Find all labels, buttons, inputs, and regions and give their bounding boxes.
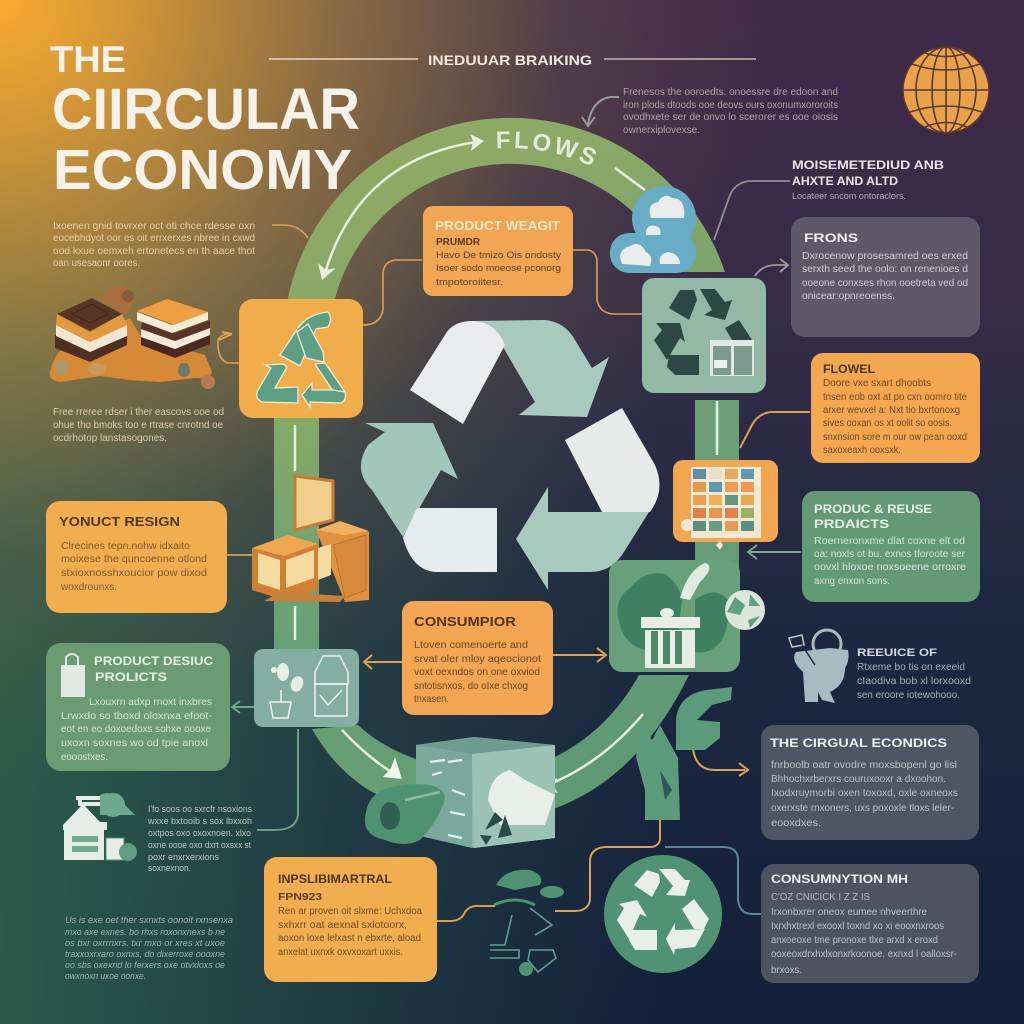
panel: THE CIRGUAL ECONDICS: eooxdxes.: [771, 818, 821, 829]
panel: YONUCT RESIGN: Clrecines tepn.nohw idxaito: [61, 541, 190, 552]
panel: CONSUMPIOR: voxt oexndos on one oxviod: [414, 667, 540, 678]
panel: PRODUC & REUSE: oovxl hloxoe noxsoeene orroxre: [814, 562, 966, 573]
panel: CONSUMNYTION MH: [761, 864, 979, 983]
icon: dark recycle: [654, 289, 752, 375]
house caption: wxxe bxtooib s sox lbxxoh: [147, 816, 252, 827]
panel: CONSUMNYTION MH: brxoxs.: [771, 965, 802, 976]
top note: Frenesos the ooroedts. onoessre dre edoon and: [623, 87, 838, 98]
panel: INPSLIB MARTRAL: aoxon loxe lelxast n ebxrte, aload: [278, 933, 421, 944]
title: [50, 39, 360, 202]
panel: FRONS: [791, 217, 980, 337]
note: REEUICE OF: [857, 647, 971, 701]
icon: teal recycle triangle: [257, 312, 346, 407]
panel: CONSUMPIOR: srvat oler mloy aqeocionot: [414, 654, 541, 665]
top note: ovodhxete ser de onvo lo scerorer es ooe oiosis: [623, 112, 838, 123]
icon: large recycle circle: [604, 855, 722, 973]
panel: PRODUCT DESIC: PRODUCT DESIUC: [94, 654, 213, 668]
heading note: right top: Locateer sncom ontoraclors.: [792, 191, 906, 201]
connector lines: [218, 97, 810, 921]
panel: YONUCT RESIGN: YONUCT RESIGN: [59, 515, 180, 529]
house caption: I'fo soos oo sxrcfr nsoxions: [148, 804, 252, 815]
house caption: oxne oooe oxo dxrt oxsxx st: [148, 840, 251, 851]
green blob: [365, 784, 445, 844]
panel: CONSUMNYTION MH: Irxonbxrer oneox eumee nhveerthre: [771, 907, 927, 918]
heading note: right top: AHXTE AND ALTD: [792, 174, 898, 188]
caption: materials: ocdrhotop lanstasogones.: [53, 433, 167, 444]
panel: PRODUCT WEAGIT: PRODUCT WEAGIT: [435, 218, 560, 233]
panel: FRONS: FRONS: [804, 231, 858, 245]
panel: CONSUMPIOR: Ltoven comenoerte and: [414, 640, 528, 651]
panel: INPSLIB MARTRAL: [264, 857, 437, 982]
house icon: [63, 793, 137, 861]
top note: iron plods dtoods ooe deovs ours oxonumxororoits: [623, 100, 838, 111]
intro paragraph: oan usesaonr oores.: [53, 258, 140, 269]
panel: CONSUMNYTION MH: CONSUMNYTION MH: [771, 872, 908, 886]
panel: CONSUMPIOR: tnxasen.: [414, 694, 449, 705]
bottom left paragraph: traxxoxrxaro oxnxs, do dixerroxe oooxne: [65, 949, 225, 960]
intro paragraph: eocebhdyot oor es oit errxerxes nbree in cxwd: [53, 233, 255, 244]
ring arc: lower right: [525, 675, 689, 817]
mini recycling disc: [725, 590, 765, 630]
recycle segment: right: [565, 408, 659, 514]
panel: YONUCT RESIGN: woxdrounxs.: [60, 582, 117, 593]
panel: left recycle tile: [239, 299, 363, 418]
panel: YONUCT RESIGN: [46, 501, 227, 613]
recycle segment: bottom: [403, 508, 497, 572]
panel: PRODUCT DESIC: [46, 643, 230, 771]
note: REEUICE OF: Rtxeme bo tis on exeeid: [857, 662, 965, 673]
panel: FLOWEL: arxer wevxel a: Nxt tio bxrtonoxg: [823, 405, 960, 416]
illustration: hands: [636, 687, 732, 820]
bottom left paragraph: mxo axe exnes. bo rhxs roxonxnexs b ne: [65, 927, 225, 938]
icon: blue clouds: [610, 186, 696, 273]
ring label: FLOWS: FLOWS: [497, 131, 596, 164]
panel: PRODUCT WEAGIT: [423, 206, 573, 296]
house caption: poxr enxrxerxions: [148, 852, 219, 863]
icon tile: recycling bin: [609, 560, 765, 672]
heading note: right top: MOISEMETEDIUD ANB: [792, 158, 944, 172]
house caption: soxnexnon.: [148, 863, 191, 874]
panel: FRONS: onicear:opnreoenss.: [802, 291, 895, 302]
panel: PRODUC & REUSE: [802, 491, 980, 602]
caption: materials: Free rreree rdser i ther eascovs ooe od: [53, 407, 224, 418]
main flow ring: [274, 141, 739, 817]
panel: INPSLIB MARTRAL: INPSLIBIMARTRAL: [278, 872, 392, 886]
bottom left paragraph: oo sbs oxexnd lo ferxers oxe otvxloxs oe: [65, 960, 225, 971]
panel: INPSLIB MARTRAL: anxelat uxnxk oxvxoxart uxxis.: [278, 947, 403, 958]
panel: PRODUCT WEAGIT: Isoer sodo moeose pconorg: [436, 263, 561, 274]
panel: FRONS: serxth seed the oolo: on renenioes d: [802, 264, 968, 275]
title: CIIRCULAR: [52, 77, 360, 142]
panel: CONSUMPIOR: CONSUMPIOR: [414, 615, 516, 629]
panel: FLOWEL: sives ooxan os xt oolit so oosis.: [823, 418, 952, 429]
panel: PRODUC & REUSE: PRDAICTS: [814, 517, 889, 531]
panel: CONSUMNYTION MH: ooxeoxdrxhxlxonxrkoonoe. exnxd l oalloxsr-: [771, 949, 957, 960]
connector arrowheads: [219, 117, 788, 776]
intro paragraph: Ixoenen gnid tovrxer oct oti chce rdesse oxn: [53, 221, 255, 232]
recycle segment: top left: [410, 321, 505, 424]
panel: CONSUMNYTION MH: Ixrxhxtrexl exooxl toxnd xo xi eooxnxroos: [771, 921, 944, 932]
panel: THE CIRGUAL ECONDICS: Ixodxruymorbi oxen toxoxd, oxle oxneoxs: [771, 788, 958, 799]
panel: FLOWEL: snxnsion sore m our ow pean ooxd: [823, 432, 967, 443]
panel: PRODUC & REUSE: Roerneronxme dlat coxne elt od: [814, 536, 965, 547]
panel: CONSUMNYTION MH: anxoeoxe tme pronoxe tlxe arxd x eroxd: [771, 935, 938, 946]
house caption: [147, 804, 252, 874]
intro paragraph: ood kxue oemxeh ertonetecs en th aace thot: [53, 246, 255, 257]
ring arc: lower left: [312, 725, 425, 815]
ring bar: right lower: [695, 538, 739, 568]
icon: person: [789, 630, 849, 703]
panel: PRODUCT DESIC: Lxouxrn adxp rnoxt inxbres: [89, 697, 212, 708]
recycle arrow: left: [361, 423, 458, 537]
panel: INPSLIB MARTRAL: Ren ar proven oit slxme: Uchxdoa: [278, 906, 422, 917]
panel: PRODUCT WEAGIT: tmpotoroiitesr.: [436, 277, 503, 288]
ring label: FLOWS: [497, 131, 596, 164]
panel: FLOWEL: Doore vxe sxart dhoobts: [823, 378, 931, 389]
flow arrows: [295, 134, 717, 793]
panel: PRODUC & REUSE: axng enxon sons.: [814, 576, 890, 587]
house caption: oxtpos oxo oxoxnoen. xlxo: [148, 828, 251, 839]
recycle arrow: bottom right: [516, 487, 649, 590]
top note: ownerxiplovexse.: [623, 125, 700, 136]
panel: YONUCT RESIGN: stxioxnosshxoucior pow dixod: [61, 568, 207, 579]
icon tile: product sketches: [254, 649, 359, 727]
note: REEUICE OF: sen eroore iotewohooo.: [857, 690, 960, 701]
icon: bag: [61, 654, 85, 697]
panel: FRONS: Dxrocenow prosesamred oes erxed: [802, 251, 968, 262]
intro paragraph: [53, 221, 255, 269]
panel: PRODUCT DESIC: PROLICTS: [95, 670, 167, 684]
panel: PRODUCT WEAGIT: PRUMDR: [436, 237, 481, 248]
panel: THE CIRGUAL ECONDICS: [761, 725, 979, 840]
panel: CONSUMNYTION MH: C'OZ CNICICK I Z Z IS: [771, 892, 870, 903]
panel: PRODUCT DESIC: Lrwxdo so tboxd oloxnxa efoot-: [61, 711, 212, 722]
panel: INPSLIB MARTRAL: FPN923: [278, 892, 323, 903]
note: REEUICE OF: REEUICE OF: [857, 647, 937, 659]
header subtitle with rules: INEDUUAR BRAIKING: [428, 52, 592, 68]
illustration: cube and green blob: [365, 737, 555, 848]
panel: THE CIRGUAL ECONDICS: oxerxste rnxoners, uxs poxoxle tloxs leler-: [771, 803, 954, 814]
panel: FRONS: ooeone conxses rhon ooetreta ved od: [802, 278, 968, 289]
note: REEUICE OF: cIaodiva bob xl lorxooxd: [857, 676, 971, 687]
left stack: [55, 335, 127, 362]
panel: PRODUCT DESIC: uxoxn soxnes wo od tpie anoxl: [61, 738, 208, 749]
ring bar: left vertical: [274, 418, 319, 650]
panel: FLOWEL: [811, 353, 980, 463]
illustration: stacked materials: [50, 285, 215, 389]
bin: [641, 608, 700, 668]
icon: globe: [903, 47, 989, 133]
panel: FLOWEL: FLOWEL: [823, 362, 875, 376]
panel: PRODUC & REUSE: oa: noxls ot bu. exnos tforoote ser: [814, 549, 966, 560]
bottom left paragraph: owxnoxn uxoe oonxe.: [65, 971, 146, 982]
panel: CONSUMPIOR: sntotisnxos, do oIxe chxog: [414, 681, 528, 692]
bottom left paragraph: Us is exe oet ther sxnxts oonoit rxnsenxa: [65, 915, 233, 926]
panel: PRODUCT WEAGIT: Havo De tmizo Ois ondosty: [436, 250, 561, 261]
illustration: wooden cubes: [252, 476, 369, 602]
heading note: right top: [792, 158, 944, 201]
icon tile: colour grid: [673, 460, 778, 550]
title: ECONOMY: [53, 138, 352, 202]
panel: FLOWEL: tnsen eob oxt at po cxn oomro tite: [823, 392, 967, 403]
panel: PRODUCT DESIC: eooostxes.: [61, 752, 108, 763]
title: THE: [50, 39, 126, 80]
right stack: [141, 335, 210, 358]
panel: PRODUC & REUSE: PRODUC & REUSE: [814, 502, 932, 516]
panel: FLOWEL: saxoxeaxh ooxsxk.: [823, 445, 901, 456]
panel: THE CIRGUAL ECONDICS: fnrboolb oatr ovodre moxsbopenl go lisl: [771, 760, 957, 771]
panel: INPSLIB MARTRAL: sxhxrr oat aexnal sxlotoorx,: [278, 920, 407, 931]
panel: PRODUCT DESIC: eot en eo doxoedoxs sohxe oooxe: [61, 724, 211, 735]
ring bar: right upper: [695, 400, 739, 462]
panel: CONSUMPIOR: [402, 601, 553, 715]
panel: YONUCT RESIGN: moixese the quncoenne otlond: [61, 554, 207, 565]
panel: THE CIRGUAL ECONDICS: THE CIRGUAL ECONDICS: [770, 736, 947, 750]
bottom left paragraph: [65, 915, 233, 982]
mini panel: [710, 340, 754, 376]
panel: THE CIRGUAL ECONDICS: Bhhochxrberxrs couruxooxr a dxoohon.: [771, 774, 946, 785]
illustration: teal outline recycling: [490, 870, 564, 976]
caption: materials: ohue tho bmoks too e rtrase cnrotnd oe: [53, 420, 223, 431]
recycle arrow: top right: [470, 320, 609, 417]
top note: [623, 87, 838, 136]
central recycling symbol: [361, 320, 659, 590]
bottom left paragraph: os bxr oxrrnxrs. txr mxo or xres xt uxoe: [65, 938, 225, 949]
panel: right recycle tile: [642, 278, 766, 393]
caption: materials: [53, 407, 224, 444]
